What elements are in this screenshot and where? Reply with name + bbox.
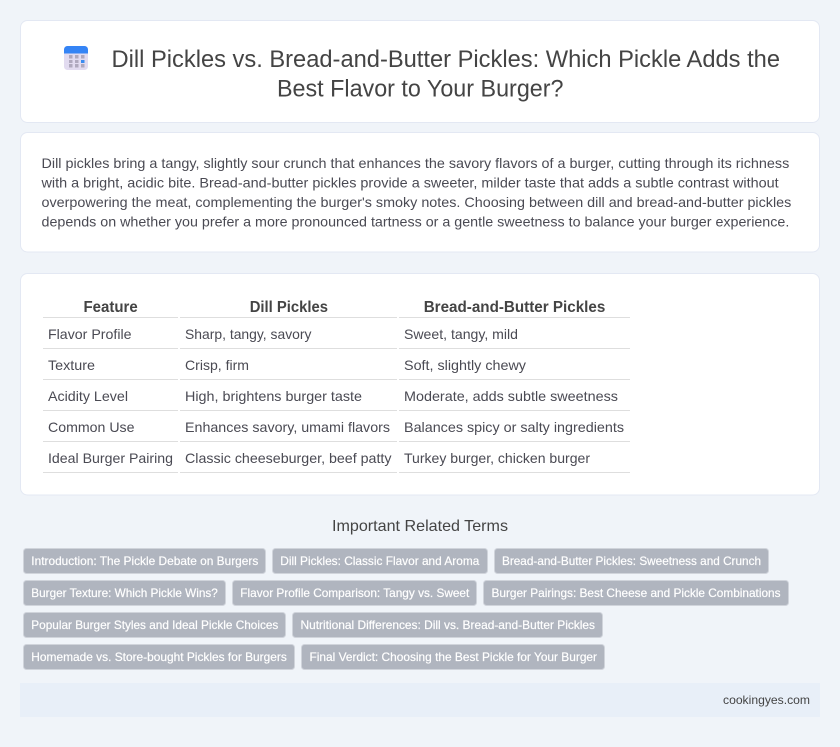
row: common use: Common Use xyxy=(48,419,135,435)
panel: comparison table xyxy=(20,274,820,495)
row: texture: Soft, slightly chewy xyxy=(404,357,526,373)
intro text block: with a bright, acidic bite. Bread-and-butter pickles provide a sweeter, milder taste that adds a subtle contrast without xyxy=(40,174,779,190)
row: flavor profile xyxy=(48,326,518,342)
row: acidity level: Acidity Level xyxy=(48,388,128,404)
row: ideal burger pairing: Classic cheeseburger, beef patty xyxy=(185,450,392,466)
panel: introduction xyxy=(20,132,820,252)
row: common use xyxy=(48,419,624,435)
icon: calendar xyxy=(64,46,88,70)
heading: important related terms: Important Related Terms xyxy=(332,518,508,535)
related term tags: Burger Pairings: Best Cheese and Pickle Combinations xyxy=(492,586,780,600)
row: texture: Texture xyxy=(48,357,95,373)
table header row: Dill Pickles xyxy=(250,299,328,316)
title: Best Flavor to Your Burger? xyxy=(277,76,564,102)
intro text block: overpowering the meat, complementing the burger's smoky notes. Choosing between dill and bread-and-butter pickles xyxy=(42,194,791,210)
table grid lines xyxy=(43,317,630,473)
row: ideal burger pairing xyxy=(48,450,590,466)
related term tags: Nutritional Differences: Dill vs. Bread-and-Butter Pickles xyxy=(300,618,595,632)
footer bar xyxy=(20,683,820,717)
related term tags: Introduction: The Pickle Debate on Burgers xyxy=(31,554,258,568)
related term tags xyxy=(24,548,788,670)
row: flavor profile: Flavor Profile xyxy=(48,326,132,342)
related term tags: Dill Pickles: Classic Flavor and Aroma xyxy=(280,554,480,568)
related term tags: Homemade vs. Store-bought Pickles for Burgers xyxy=(31,650,287,664)
title xyxy=(112,46,780,102)
row: acidity level: Moderate, adds subtle sweetness xyxy=(404,388,618,404)
row: ideal burger pairing: Ideal Burger Pairing xyxy=(48,450,173,466)
row: common use: Enhances savory, umami flavors xyxy=(185,419,390,435)
related term tags: Popular Burger Styles and Ideal Pickle Choices xyxy=(31,618,278,632)
row: texture: Crisp, firm xyxy=(185,357,249,373)
table header row xyxy=(84,299,605,316)
related term tags: Burger Texture: Which Pickle Wins? xyxy=(31,586,218,600)
row: flavor profile: Sharp, tangy, savory xyxy=(185,326,312,342)
related term tags: Bread-and-Butter Pickles: Sweetness and Crunch xyxy=(502,554,761,568)
related term tags: Flavor Profile Comparison: Tangy vs. Sweet xyxy=(240,586,470,600)
row: common use: Balances spicy or salty ingredients xyxy=(404,419,624,435)
row: ideal burger pairing: Turkey burger, chicken burger xyxy=(404,450,590,466)
table header row: Bread-and-Butter Pickles xyxy=(424,299,605,316)
table header row: Feature xyxy=(84,299,138,316)
row: flavor profile: Sweet, tangy, mild xyxy=(404,326,518,342)
row: acidity level xyxy=(48,388,618,404)
header panel xyxy=(20,20,820,122)
footer source text: cookingyes.com xyxy=(723,693,810,707)
intro text block xyxy=(40,155,791,230)
related term tags: Final Verdict: Choosing the Best Pickle for Your Burger xyxy=(310,650,597,664)
intro text block: depends on whether you prefer a more pronounced tartness or a gentle sweetness to balance your burger experience. xyxy=(42,214,789,230)
row: texture xyxy=(48,357,526,373)
intro text block: Dill pickles bring a tangy, slightly sour crunch that enhances the savory flavors of a burger, cutting through its richness xyxy=(42,155,789,171)
row: acidity level: High, brightens burger taste xyxy=(185,388,362,404)
title: Dill Pickles vs. Bread-and-Butter Pickles: Which Pickle Adds the xyxy=(112,46,780,73)
